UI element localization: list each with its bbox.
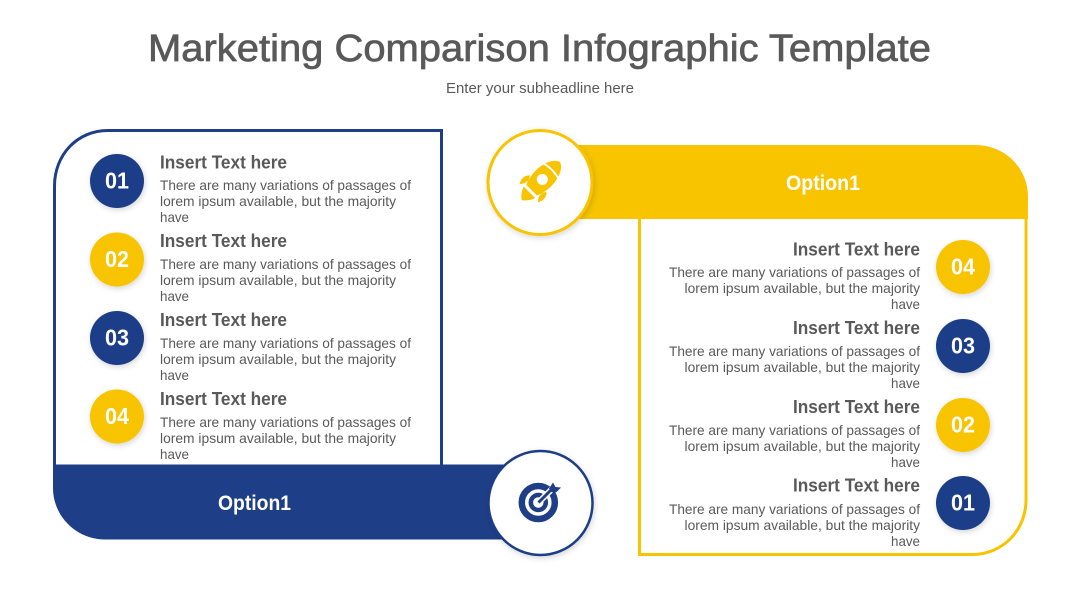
item 02 right: lorem ipsum available, but the majority (684, 438, 920, 454)
item 01 right: have (891, 533, 920, 549)
item 04 right: Insert Text here (793, 240, 920, 260)
item 01 right: There are many variations of passages of (669, 501, 920, 517)
item 02 left: have (160, 288, 189, 304)
item 04 left: Insert Text here (160, 389, 287, 409)
item 04 right: lorem ipsum available, but the majority (684, 280, 920, 296)
item 03 right: lorem ipsum available, but the majority (684, 359, 920, 375)
item 04 right (669, 240, 990, 312)
banner: left option (53, 464, 520, 540)
item 04 left: There are many variations of passages of (160, 414, 411, 430)
item 01 left: Insert Text here (160, 152, 287, 172)
item 03 left: There are many variations of passages of (160, 335, 411, 351)
item 02 right: Insert Text here (793, 397, 920, 417)
item 02 right (669, 397, 990, 470)
banner label: right: Option1 (786, 172, 860, 195)
item 04 left: lorem ipsum available, but the majority (160, 430, 396, 446)
item 03 right: Insert Text here (793, 318, 920, 338)
subheadline: Enter your subheadline here (446, 81, 634, 97)
item 02 left: There are many variations of passages of (160, 256, 411, 272)
item 02 right: have (891, 454, 920, 470)
item 04 left: have (160, 446, 189, 462)
item 01 left: have (160, 209, 189, 225)
item 01 left: 01 (105, 168, 129, 194)
item 03 left: have (160, 367, 189, 383)
item 02 left: Insert Text here (160, 231, 287, 251)
item 03 right: 03 (951, 332, 975, 358)
item 01 left (90, 152, 411, 225)
item 01 left: There are many variations of passages of (160, 177, 411, 193)
panel: right option (488, 130, 1028, 554)
banner: right option (560, 145, 1028, 219)
banner label: left: Option1 (218, 492, 291, 515)
item 03 right (669, 318, 990, 391)
panel outline: right (640, 217, 1026, 554)
item 02 right: 02 (951, 412, 975, 438)
item 01 right: 01 (951, 490, 975, 516)
item 03 left: Insert Text here (160, 310, 287, 330)
item 04 left (90, 389, 411, 462)
item 04 right: There are many variations of passages of (669, 264, 920, 280)
item 03 right: There are many variations of passages of (669, 343, 920, 359)
icon badge: target (488, 451, 592, 555)
item 04 left: 04 (105, 403, 129, 429)
item 04 right: have (891, 296, 920, 312)
title: Marketing Comparison Infographic Template (148, 28, 931, 70)
item 02 left (90, 231, 411, 304)
item 01 right: Insert Text here (793, 476, 920, 496)
item 01 right: lorem ipsum available, but the majority (684, 517, 920, 533)
item 03 right: have (891, 375, 920, 391)
item 01 left: lorem ipsum available, but the majority (160, 193, 396, 209)
panel: left option (53, 130, 592, 555)
item 01 right (669, 476, 990, 549)
item 04 right: 04 (951, 254, 975, 280)
panel outline: left (54, 130, 442, 466)
item 02 left: lorem ipsum available, but the majority (160, 272, 396, 288)
item 02 left: 02 (105, 246, 129, 272)
item 03 left: lorem ipsum available, but the majority (160, 351, 396, 367)
item 02 right: There are many variations of passages of (669, 422, 920, 438)
item 03 left (90, 310, 411, 383)
item 03 left: 03 (105, 324, 129, 350)
icon badge: rocket (488, 130, 592, 234)
